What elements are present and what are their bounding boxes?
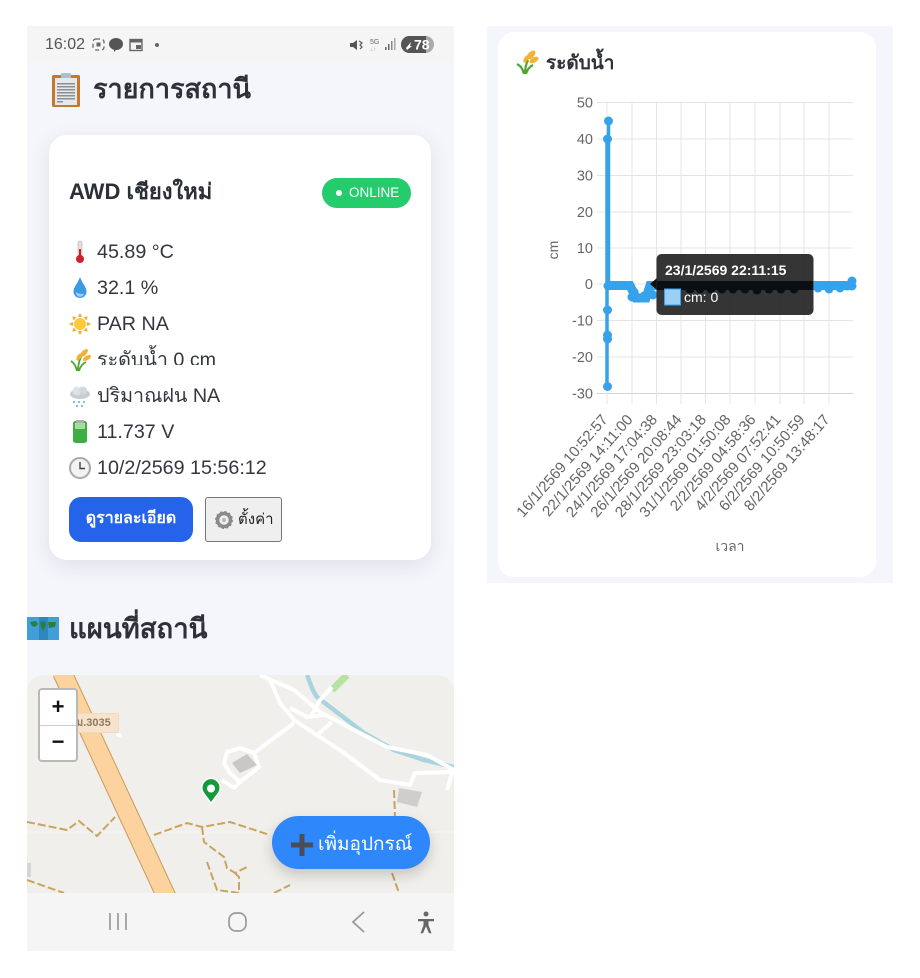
y axis labels: -20 <box>572 350 593 366</box>
map heading text: แผนที่สถานี <box>69 613 207 644</box>
icon: world map <box>27 617 59 640</box>
road label: ม.3035 <box>76 717 111 729</box>
y axis labels <box>572 96 593 402</box>
reading: rainfall: ปริมาณฝน NA <box>97 385 220 407</box>
y axis labels: 50 <box>577 96 593 112</box>
panel: station card <box>49 135 431 560</box>
badge dot <box>336 190 342 196</box>
map marker <box>201 778 221 804</box>
chart tooltip <box>650 254 814 315</box>
heading: station list <box>52 73 251 107</box>
chart card <box>498 32 876 577</box>
reading: water level <box>70 345 216 372</box>
x axis title: เวลา <box>715 538 745 554</box>
nav icons <box>109 912 434 934</box>
panel: water level chart screenshot <box>487 26 893 583</box>
reading: battery: 11.737 V <box>97 421 174 443</box>
button: details: ดูรายละเอียด <box>86 510 176 527</box>
x axis labels: 24/1/2569 17:04:38 <box>563 411 661 521</box>
status icons right: ↓↑ <box>370 47 376 53</box>
badge label: ONLINE <box>349 185 399 200</box>
data series <box>603 116 856 391</box>
zoom in: + <box>52 694 64 719</box>
station list heading text: รายการสถานี <box>93 74 251 104</box>
chart tooltip: 23/1/2569 22:11:15 <box>665 262 787 278</box>
reading: humidity: 32.1 % <box>97 277 158 299</box>
panel: phone screenshot station list <box>27 26 454 951</box>
x axis labels: 28/1/2569 23:03:18 <box>612 411 710 521</box>
chart heading text: ระดับน้ำ <box>546 53 614 74</box>
road label <box>64 713 119 733</box>
zoom out: − <box>52 729 64 754</box>
status icons left <box>92 38 159 52</box>
station name: AWD เชียงใหม่ <box>69 179 212 204</box>
icon: plus <box>291 834 313 856</box>
x axis labels <box>513 411 834 521</box>
heading: station map <box>27 609 208 644</box>
y axis labels: 0 <box>585 277 593 293</box>
icon: rice <box>516 50 538 74</box>
x axis labels: 4/2/2569 07:52:41 <box>692 411 785 514</box>
x axis labels: 26/1/2569 20:08:44 <box>587 411 686 521</box>
zoom in <box>40 690 76 726</box>
chart heading <box>516 48 614 74</box>
map roads and paths <box>27 675 454 893</box>
x axis labels: 16/1/2569 10:52:57 <box>513 411 612 521</box>
status icons right: 5G <box>370 39 379 46</box>
y axis title: cm <box>545 241 561 259</box>
y axis labels: 30 <box>577 168 593 184</box>
button: add device <box>272 816 430 869</box>
x axis labels: 8/2/2569 13:48:17 <box>741 411 834 514</box>
status bar <box>27 26 454 62</box>
chart tooltip: cm: 0 <box>684 289 718 305</box>
settings label: ตั้งค่า <box>238 511 274 528</box>
chart gridlines <box>597 102 853 404</box>
button: settings <box>205 497 282 542</box>
y axis labels: 10 <box>577 241 593 257</box>
reading: timestamp: 10/2/2569 15:56:12 <box>97 457 267 479</box>
status badge: online <box>322 178 411 208</box>
x axis labels: 2/2/2569 04:58:36 <box>667 411 760 514</box>
x axis labels: 22/1/2569 14:11:00 <box>539 411 637 520</box>
x axis labels: 6/2/2569 10:50:59 <box>716 411 809 514</box>
y axis labels: 20 <box>577 205 593 221</box>
reading: temperature: 45.89 °C <box>97 241 174 263</box>
status icons right <box>350 36 434 53</box>
add device label: เพิ่มอุปกรณ์ <box>318 834 412 855</box>
button: details <box>69 497 193 542</box>
status icons right: 78 <box>414 36 430 52</box>
status time: 16:02 <box>45 36 85 53</box>
y axis labels: 40 <box>577 132 593 148</box>
icon: clipboard <box>52 73 80 107</box>
zoom control <box>38 688 78 762</box>
y axis labels: -10 <box>572 314 593 330</box>
x axis labels: 31/1/2569 01:50:08 <box>636 411 735 521</box>
icon: gear <box>215 511 233 529</box>
navigation bar <box>27 893 454 951</box>
reading: PAR: PAR NA <box>97 313 169 335</box>
y axis labels: -30 <box>572 386 593 402</box>
panel: map <box>27 675 454 893</box>
